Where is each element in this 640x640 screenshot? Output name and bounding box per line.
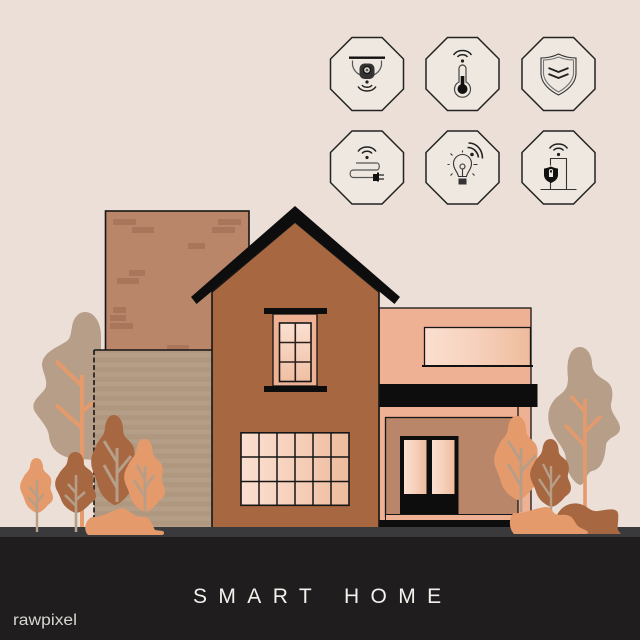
icon: smart plug (330, 131, 404, 204)
watermark: rawpixel (13, 612, 77, 629)
icon: smart door lock (522, 131, 595, 204)
right small trees (494, 416, 621, 534)
upper window (264, 308, 327, 392)
ground (0, 527, 640, 640)
left large tree (33, 312, 101, 530)
icon: smart light bulb (426, 131, 499, 204)
title: SMART HOME (193, 585, 453, 608)
tree: brown (530, 439, 571, 512)
brick back wall (106, 211, 249, 351)
tree: orange by wall (124, 439, 165, 512)
icon: smart thermometer (426, 38, 499, 110)
tree: small brown (55, 452, 96, 532)
icon: security shield (522, 38, 595, 110)
tree: small orange (20, 458, 53, 532)
porch step (386, 514, 530, 520)
bush left (85, 508, 164, 535)
left small trees (20, 415, 165, 535)
right large tree (548, 347, 620, 512)
siding wall (94, 350, 213, 528)
roof (191, 206, 400, 304)
bush orange (510, 507, 588, 534)
icon: security camera (330, 38, 404, 110)
bush brown (557, 503, 621, 534)
lower window (241, 433, 349, 505)
main gabled house (191, 206, 400, 528)
porch band (379, 384, 538, 407)
right wing of house (379, 308, 538, 528)
tree: orange (494, 416, 540, 512)
door (400, 436, 458, 514)
wing upper window (422, 328, 533, 367)
porch panel (386, 407, 518, 516)
tree: tall brown (91, 415, 137, 505)
